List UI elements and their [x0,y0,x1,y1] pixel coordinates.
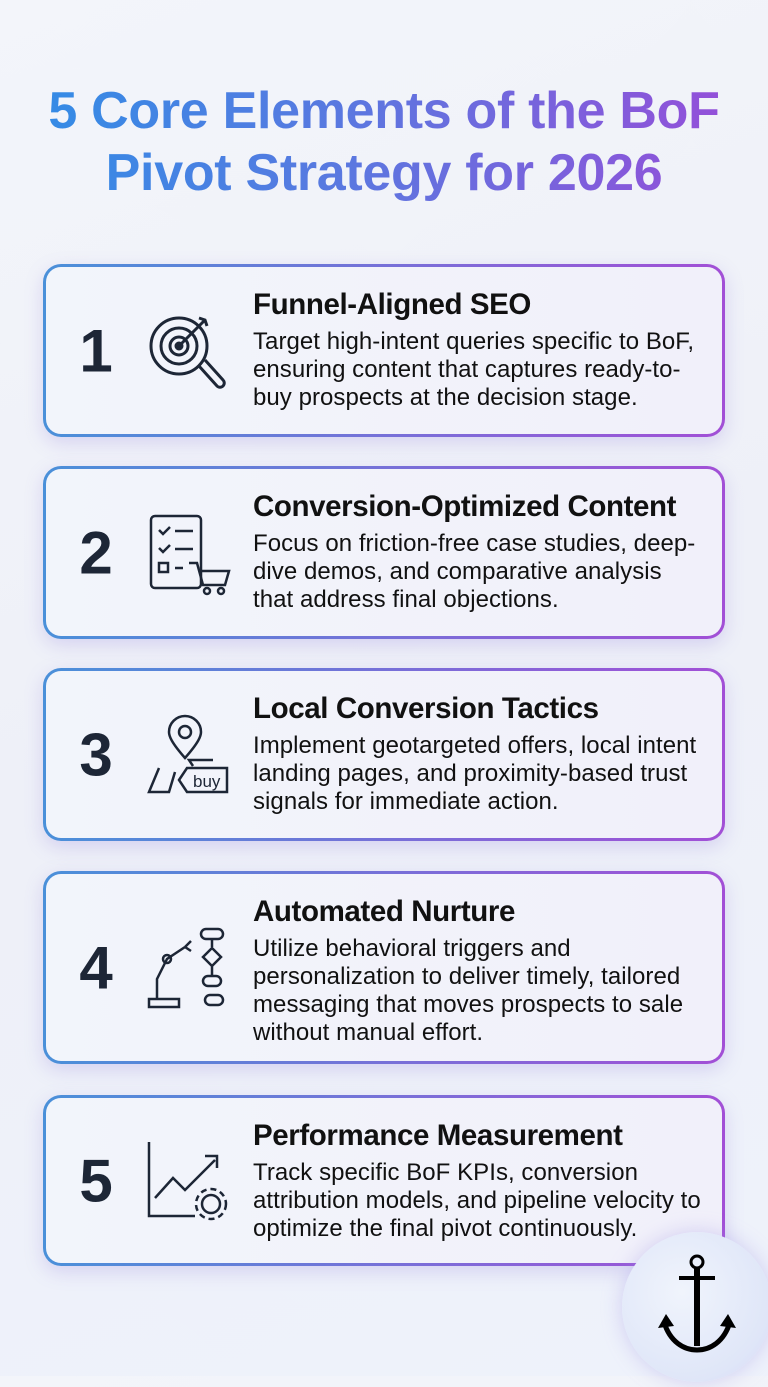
number 3: 3 [79,721,113,788]
panel: 4 automated nurture [43,871,725,1064]
icon: robot arm flowchart [148,928,224,1008]
text: Implement geotargeted offers, local intent landing pages, and proximity-based trust signals for immediate action. [253,732,696,815]
title: Pivot Strategy for 2026 [106,144,662,202]
text [253,692,696,815]
icon: map pin buy tag: buy [193,772,221,790]
text [253,490,695,613]
icon: target magnifier [150,316,226,389]
panel: 2 conversion-optimized content [43,466,725,639]
text: Target high-intent queries specific to BoF, ensuring content that captures ready-to-buy prospects at the decision stage. [253,328,694,411]
text: Utilize behavioral triggers and personalization to deliver timely, tailored messaging that moves prospects to sale without manual effort. [253,935,683,1046]
text: Local Conversion Tactics [253,692,599,725]
text: Conversion-Optimized Content [253,490,676,523]
text: Performance Measurement [253,1119,623,1152]
number 5: 5 [79,1147,113,1214]
icon: map pin buy tag [147,714,228,794]
icon: anchor badge [622,1232,768,1382]
number 4: 4 [79,934,113,1001]
text: Track specific BoF KPIs, conversion attribution models, and pipeline velocity to optimize the final pivot continuously. [253,1159,701,1242]
title [0,80,768,204]
icon: checklist cart [150,514,231,596]
panel: 5 performance measurement [43,1095,725,1266]
text [253,1119,701,1242]
number 2: 2 [79,519,113,586]
text: Focus on friction-free case studies, deep-dive demos, and comparative analysis that address final objections. [253,530,695,613]
text: Automated Nurture [253,895,515,928]
text: Funnel-Aligned SEO [253,288,531,321]
panel: 3 local conversion tactics [43,668,725,841]
icon: chart gear [148,1142,228,1220]
number 1: 1 [79,317,113,384]
title: 5 Core Elements of the BoF [48,82,720,140]
panel: 1 funnel-aligned SEO [43,264,725,437]
text [253,288,694,411]
